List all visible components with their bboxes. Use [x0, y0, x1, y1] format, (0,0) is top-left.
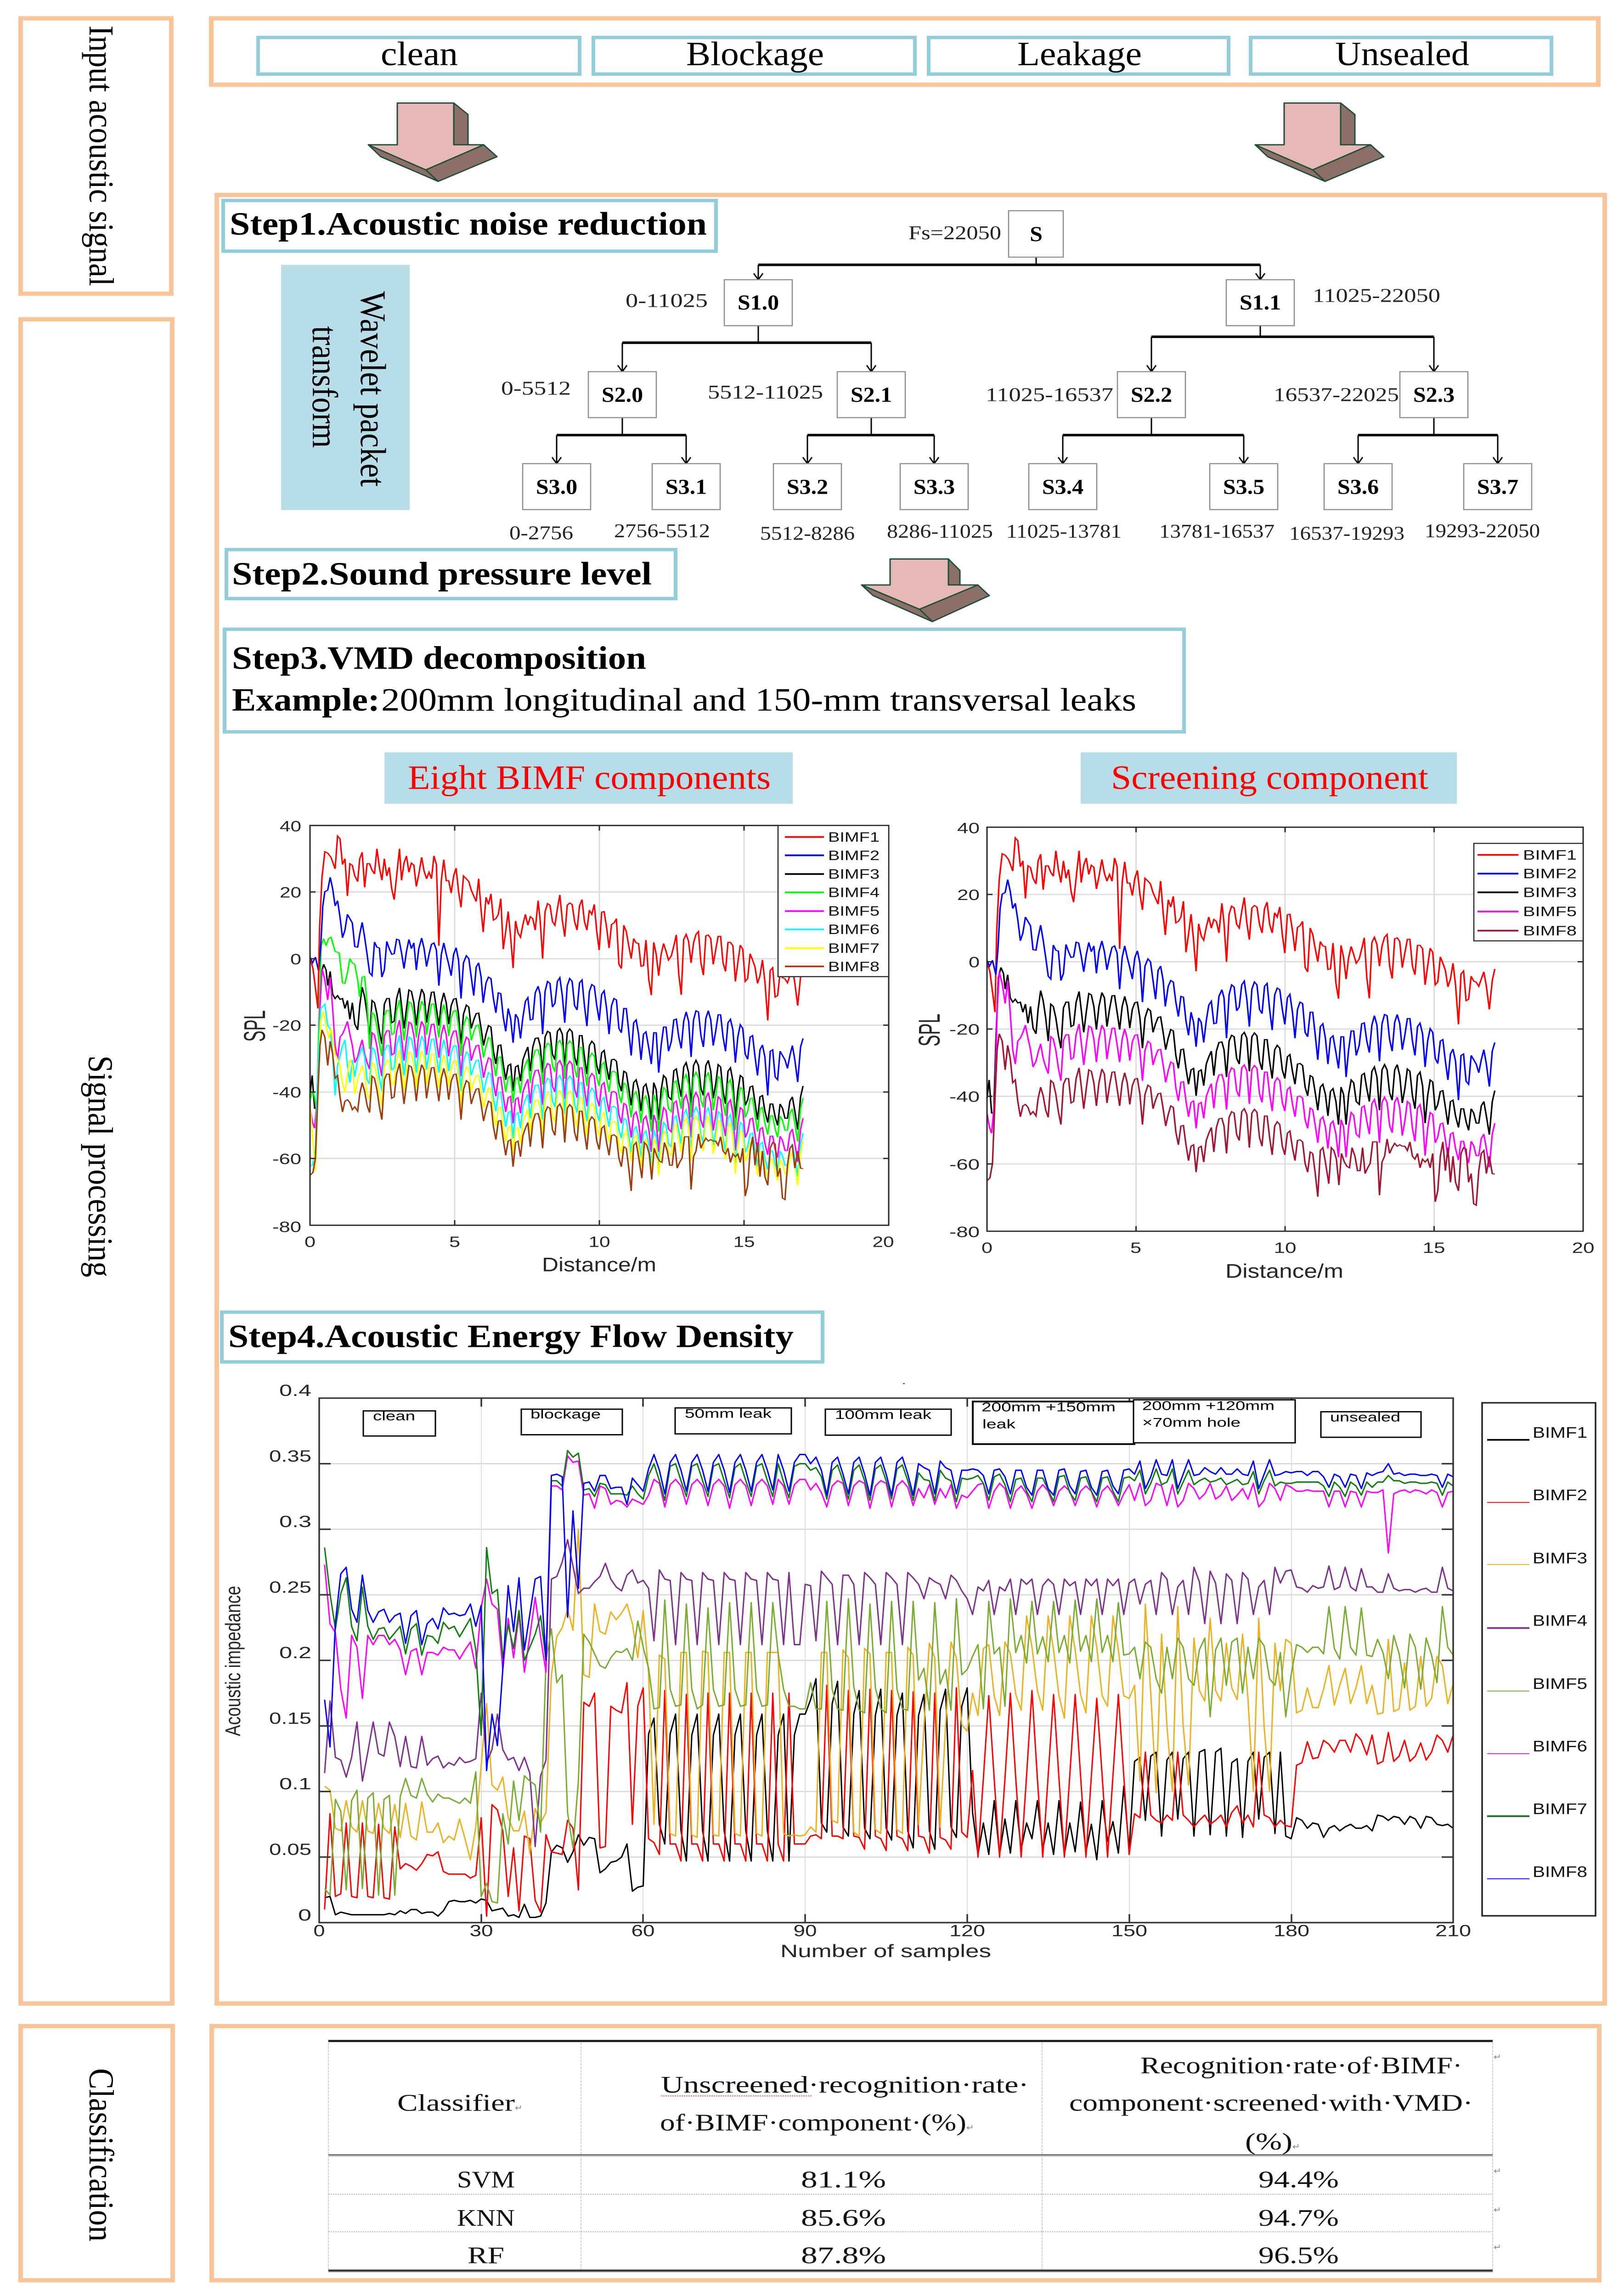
- legend: eight BIMF: BIMF4: [828, 885, 880, 900]
- legend: screened BIMF: BIMF8: [1523, 923, 1577, 939]
- panel: input acoustic signal label: Input acoustic signal: [82, 26, 120, 286]
- annotation: 200mm plus 120mm and 70mm hole: 200mm +120mm: [1142, 1399, 1275, 1413]
- curves: BIMF1, 2, 3, 5, 8: [987, 838, 1495, 1205]
- x-axis tick labels: 20: [1572, 1240, 1595, 1256]
- node S3.5: S3.5: [1223, 475, 1264, 499]
- y-axis tick labels: 0.05: [269, 1840, 311, 1858]
- x-axis tick labels: 10: [589, 1234, 610, 1250]
- node S3.7: [1464, 464, 1532, 510]
- frequency band labels: 2756-5512: [614, 520, 710, 542]
- node S3.1: [652, 464, 720, 510]
- annotation: 100mm leak: [825, 1408, 951, 1435]
- annotation: 200mm plus 120mm and 70mm hole: ×70mm hole: [1142, 1416, 1241, 1430]
- chart: acoustic energy flow density: [222, 1381, 1596, 1961]
- y-axis tick labels: [272, 818, 301, 1236]
- heading: step 4: Step4.Acoustic Energy Flow Density: [228, 1318, 794, 1354]
- annotation: blockage: blockage: [530, 1407, 601, 1422]
- table header: [397, 2052, 1473, 2155]
- node S3.6: [1324, 464, 1392, 510]
- heading: step 4: [222, 1312, 823, 1362]
- frequency band labels: 5512-8286: [760, 522, 855, 544]
- row: RF: [468, 2242, 1339, 2268]
- legend: eight BIMF: BIMF5: [828, 903, 880, 919]
- frequency band labels: 5512-11025: [708, 381, 823, 403]
- table: recognition rates: ↵: [1494, 2053, 1501, 2062]
- frequency band labels: 16537-22025: [1274, 383, 1399, 405]
- annotation: unsealed: [1321, 1411, 1421, 1437]
- arrow: right input arrow: [1255, 103, 1384, 181]
- legend: eight BIMF: BIMF7: [828, 940, 880, 956]
- x-axis tick labels: 90: [794, 1922, 817, 1940]
- node S1.1: S1.1: [1240, 291, 1281, 315]
- x-axis tick labels: 10: [1274, 1240, 1297, 1256]
- node S3.3: S3.3: [914, 475, 955, 499]
- y-axis tick labels: 20: [280, 884, 301, 901]
- label: wavelet packet transform: [281, 265, 410, 510]
- table header: Recognition·rate·of·BIMF·: [1140, 2052, 1462, 2079]
- legend: impedance series: BIMF7: [1533, 1801, 1587, 1818]
- axis label: acoustic impedance: Acoustic impedance: [222, 1586, 245, 1736]
- node S2.1: S2.1: [851, 383, 892, 407]
- heading: step 3 and example: 200mm longitudinal and 150-mm transversal leaks: [381, 682, 1136, 718]
- x-axis tick labels: 5: [1130, 1240, 1141, 1256]
- annotation: 200mm plus 150mm leak: [973, 1400, 1134, 1444]
- category: blockage: [593, 35, 915, 74]
- annotation: 200mm plus 120mm and 70mm hole: [1134, 1399, 1295, 1443]
- frequency band labels: 0-2756: [509, 522, 573, 544]
- x-axis tick labels: [305, 1234, 894, 1250]
- node S2.2: S2.2: [1131, 383, 1172, 407]
- y-axis tick labels: 40: [957, 820, 980, 837]
- annotation: blockage: [521, 1407, 622, 1435]
- table: recognition rates: ↵: [1494, 2206, 1501, 2215]
- y-axis tick labels: -40: [949, 1089, 980, 1105]
- y-axis tick labels: -60: [949, 1156, 980, 1173]
- row: KNN: KNN: [457, 2205, 515, 2231]
- legend: screened BIMF: BIMF3: [1523, 885, 1577, 900]
- chart: SPL of eight BIMF components: [238, 818, 894, 1276]
- x-axis tick labels: [981, 1240, 1595, 1256]
- chart: SPL of screened components: [913, 820, 1595, 1282]
- y-axis tick labels: 0: [290, 951, 301, 968]
- category: clean: [258, 35, 580, 74]
- row: RF: 87.8%: [801, 2242, 886, 2268]
- x-axis tick labels: 0: [314, 1922, 325, 1940]
- y-axis tick labels: [949, 820, 980, 1241]
- heading: step 3 and example: [225, 629, 1184, 732]
- y-axis tick labels: 0.35: [269, 1447, 311, 1465]
- annotation: 200mm plus 150mm leak: leak: [982, 1417, 1016, 1431]
- legend: impedance series: BIMF6: [1533, 1738, 1587, 1755]
- curves: BIMF1 to BIMF8: [310, 836, 803, 1199]
- annotation: clean: [363, 1409, 435, 1436]
- curves: BIMF series: [325, 1451, 1453, 1917]
- label: wavelet packet transform: Wavelet packet: [353, 291, 392, 487]
- axis label: distance: Distance/m: [542, 1254, 656, 1276]
- node S2.0: [588, 371, 656, 418]
- node S: [1009, 211, 1063, 257]
- x-axis tick labels: [314, 1922, 1471, 1940]
- y-axis tick labels: 0.15: [269, 1709, 311, 1728]
- node S1.0: S1.0: [738, 291, 779, 315]
- y-axis tick labels: [269, 1381, 311, 1924]
- series BIMF3: [325, 1529, 1453, 1860]
- row: SVM: 94.4%: [1258, 2166, 1339, 2193]
- node S3.5: [1210, 464, 1278, 510]
- category: unsealed: Unsealed: [1335, 35, 1469, 73]
- arrow: step 2 to step 3: [862, 559, 989, 622]
- annotation: clean: clean: [373, 1409, 415, 1424]
- y-axis tick labels: 20: [957, 887, 980, 904]
- series BIMF1: [325, 1679, 1453, 1917]
- panel: input signal categories: [211, 18, 1598, 84]
- x-axis tick labels: 15: [733, 1234, 755, 1250]
- heading: screening component: Screening component: [1111, 759, 1428, 796]
- table header: ↵: [966, 2123, 974, 2133]
- table header: Unscreened·recognition·rate·: [661, 2071, 1029, 2098]
- legend: impedance series: BIMF1: [1533, 1424, 1587, 1441]
- panel: signal processing steps: [217, 195, 1605, 2003]
- table header: of·BIMF·component·(%): [660, 2109, 966, 2136]
- series BIMF4: [325, 1540, 1453, 1846]
- heading: eight BIMF components: [384, 752, 793, 804]
- heading: step 1: [223, 201, 716, 251]
- heading: eight BIMF components: Eight BIMF components: [408, 759, 771, 796]
- node S3.4: [1029, 464, 1097, 510]
- legend: impedance series: BIMF5: [1533, 1676, 1587, 1693]
- heading: step 3 and example: Example:: [232, 682, 380, 718]
- category: leakage: Leakage: [1017, 35, 1142, 73]
- frequency band labels: 19293-22050: [1425, 520, 1540, 542]
- annotation: 200mm plus 150mm leak: 200mm +150mm: [981, 1400, 1116, 1414]
- axis label: SPL: SPL: [913, 1013, 947, 1047]
- category: unsealed: [1251, 35, 1551, 74]
- node S3.3: [900, 464, 968, 510]
- y-axis tick labels: -80: [272, 1219, 301, 1236]
- legend: screened BIMF: BIMF1: [1523, 847, 1577, 863]
- axis label: number of samples: Number of samples: [780, 1941, 991, 1961]
- series BIMF7: [325, 1451, 1453, 1735]
- annotation: 50mm leak: 50mm leak: [685, 1407, 772, 1421]
- category: blockage: Blockage: [686, 35, 824, 73]
- series BIMF2: [325, 1683, 1453, 1916]
- node S1.1: [1226, 280, 1294, 326]
- legend: eight BIMF: BIMF2: [828, 848, 880, 863]
- legend: eight BIMF: BIMF1: [828, 829, 880, 845]
- y-axis tick labels: 0.2: [279, 1643, 311, 1662]
- row: SVM: 81.1%: [801, 2166, 886, 2193]
- heading: step 2: [226, 550, 676, 599]
- legend: eight BIMF: BIMF3: [828, 867, 880, 882]
- legend: impedance series: BIMF4: [1533, 1613, 1587, 1629]
- y-axis tick labels: 0: [969, 954, 980, 971]
- legend: impedance series: BIMF3: [1533, 1550, 1587, 1567]
- y-axis tick labels: 0.4: [279, 1381, 311, 1400]
- node S3.0: [523, 464, 591, 510]
- legend: eight BIMF: BIMF6: [828, 922, 880, 937]
- x-axis tick labels: 15: [1423, 1240, 1445, 1256]
- legend: screened BIMF: BIMF2: [1523, 866, 1577, 881]
- x-axis tick labels: 210: [1435, 1922, 1471, 1940]
- y-axis tick labels: -80: [949, 1224, 980, 1241]
- node S3.4: S3.4: [1042, 475, 1083, 499]
- y-axis tick labels: 40: [280, 818, 301, 835]
- x-axis tick labels: 20: [873, 1234, 894, 1250]
- y-axis tick labels: -60: [272, 1151, 301, 1167]
- legend: impedance series: BIMF8: [1533, 1864, 1587, 1880]
- x-axis tick labels: 5: [449, 1234, 460, 1250]
- x-axis tick labels: 30: [470, 1922, 493, 1940]
- table header: ↵: [515, 2104, 523, 2113]
- node S: S: [1030, 222, 1043, 246]
- node S3.0: S3.0: [536, 475, 577, 499]
- axis label: SPL: SPL: [238, 1010, 272, 1042]
- annotation: 50mm leak: [675, 1407, 791, 1434]
- y-axis tick labels: -20: [272, 1018, 301, 1034]
- table: recognition rates: [328, 2039, 1501, 2272]
- frequency band labels: 13781-16537: [1159, 520, 1275, 542]
- tree connectors: [552, 257, 1502, 464]
- series BIMF8: [325, 1454, 1453, 1771]
- category: clean: clean: [381, 35, 458, 73]
- frequency band labels: 11025-22050: [1313, 284, 1440, 306]
- legend: eight BIMF: [778, 826, 889, 977]
- node S2.0: S2.0: [602, 383, 643, 407]
- node S3.2: S3.2: [787, 475, 828, 499]
- x-axis tick labels: 0: [981, 1240, 993, 1256]
- label: wavelet packet transform: transform: [305, 326, 344, 448]
- y-axis tick labels: -20: [949, 1021, 980, 1038]
- frequency band labels: 11025-16537: [986, 383, 1113, 405]
- frequency band labels: 16537-19293: [1289, 522, 1404, 544]
- node S2.2: [1117, 371, 1185, 418]
- y-axis tick labels: -40: [272, 1084, 301, 1101]
- table header: (%): [1245, 2128, 1292, 2155]
- panel: classification label: Classification: [82, 2068, 120, 2241]
- node S3.1: S3.1: [666, 475, 707, 499]
- x-axis tick labels: 60: [631, 1922, 655, 1940]
- legend: eight BIMF: BIMF8: [828, 959, 880, 974]
- node S2.3: S2.3: [1413, 383, 1455, 407]
- node S2.1: [837, 371, 905, 418]
- frequency band labels: 0-11025: [626, 289, 708, 311]
- table header: Classifier: [397, 2090, 515, 2116]
- heading: step 1: Step1.Acoustic noise reduction: [230, 206, 707, 242]
- table: recognition rates: ↵: [1494, 2167, 1501, 2176]
- row: SVM: [457, 2166, 1339, 2193]
- x-axis tick labels: 150: [1111, 1922, 1147, 1940]
- heading: step 3 and example: Step3.VMD decomposition: [232, 640, 646, 676]
- row: RF: RF: [468, 2242, 504, 2268]
- frequency band labels: 11025-13781: [1006, 520, 1122, 542]
- series BIMF5: [325, 1599, 1453, 1903]
- table: recognition rates: ↵: [1494, 2243, 1501, 2252]
- row: RF: 96.5%: [1258, 2242, 1339, 2268]
- legend: impedance series: BIMF2: [1533, 1487, 1587, 1504]
- series BIMF6: [325, 1456, 1453, 1718]
- annotation: 100mm leak: 100mm leak: [835, 1408, 932, 1422]
- x-axis tick labels: 0: [305, 1234, 316, 1250]
- panel: signal processing label: [21, 319, 172, 2003]
- node S1.0: [724, 280, 792, 326]
- row: KNN: 94.7%: [1258, 2205, 1339, 2231]
- legend: screened BIMF: [1474, 844, 1583, 941]
- frequency band labels: Fs=22050: [908, 222, 1001, 244]
- legend: screened BIMF: BIMF5: [1523, 904, 1577, 919]
- row: KNN: [457, 2205, 1339, 2231]
- diagram: wavelet packet tree: [501, 211, 1540, 544]
- x-axis tick labels: 120: [949, 1922, 985, 1940]
- annotation: unsealed: unsealed: [1330, 1411, 1400, 1424]
- heading: step 2: Step2.Sound pressure level: [232, 556, 652, 591]
- y-axis tick labels: 0.3: [279, 1513, 311, 1531]
- panel: classification results: [212, 2026, 1599, 2280]
- row: SVM: SVM: [457, 2166, 515, 2193]
- frequency band labels: 8286-11025: [887, 520, 993, 542]
- node S3.6: S3.6: [1337, 475, 1379, 499]
- y-axis tick labels: 0: [298, 1906, 311, 1924]
- x-axis tick labels: 180: [1274, 1922, 1309, 1940]
- row: KNN: 85.6%: [801, 2205, 886, 2231]
- frequency band labels: 0-5512: [501, 377, 571, 399]
- arrow: left input arrow: [368, 103, 497, 181]
- table header: component·screened·with·VMD·: [1069, 2090, 1473, 2116]
- node S3.2: [773, 464, 841, 510]
- y-axis tick labels: 0.25: [269, 1578, 311, 1596]
- legend: impedance series: [1482, 1403, 1596, 1916]
- panel: input acoustic signal label: [21, 18, 171, 294]
- node S3.7: S3.7: [1477, 475, 1518, 499]
- frequency band labels: [501, 222, 1540, 544]
- axis label: distance: Distance/m: [1225, 1261, 1343, 1282]
- panel: signal processing label: Signal processing: [81, 1055, 119, 1277]
- y-axis tick labels: 0.1: [279, 1775, 311, 1793]
- panel: classification label: [21, 2026, 173, 2280]
- table header: ↵: [1292, 2143, 1300, 2152]
- category: leakage: [929, 35, 1229, 74]
- node S2.3: [1400, 371, 1468, 418]
- heading: screening component: [1081, 752, 1457, 804]
